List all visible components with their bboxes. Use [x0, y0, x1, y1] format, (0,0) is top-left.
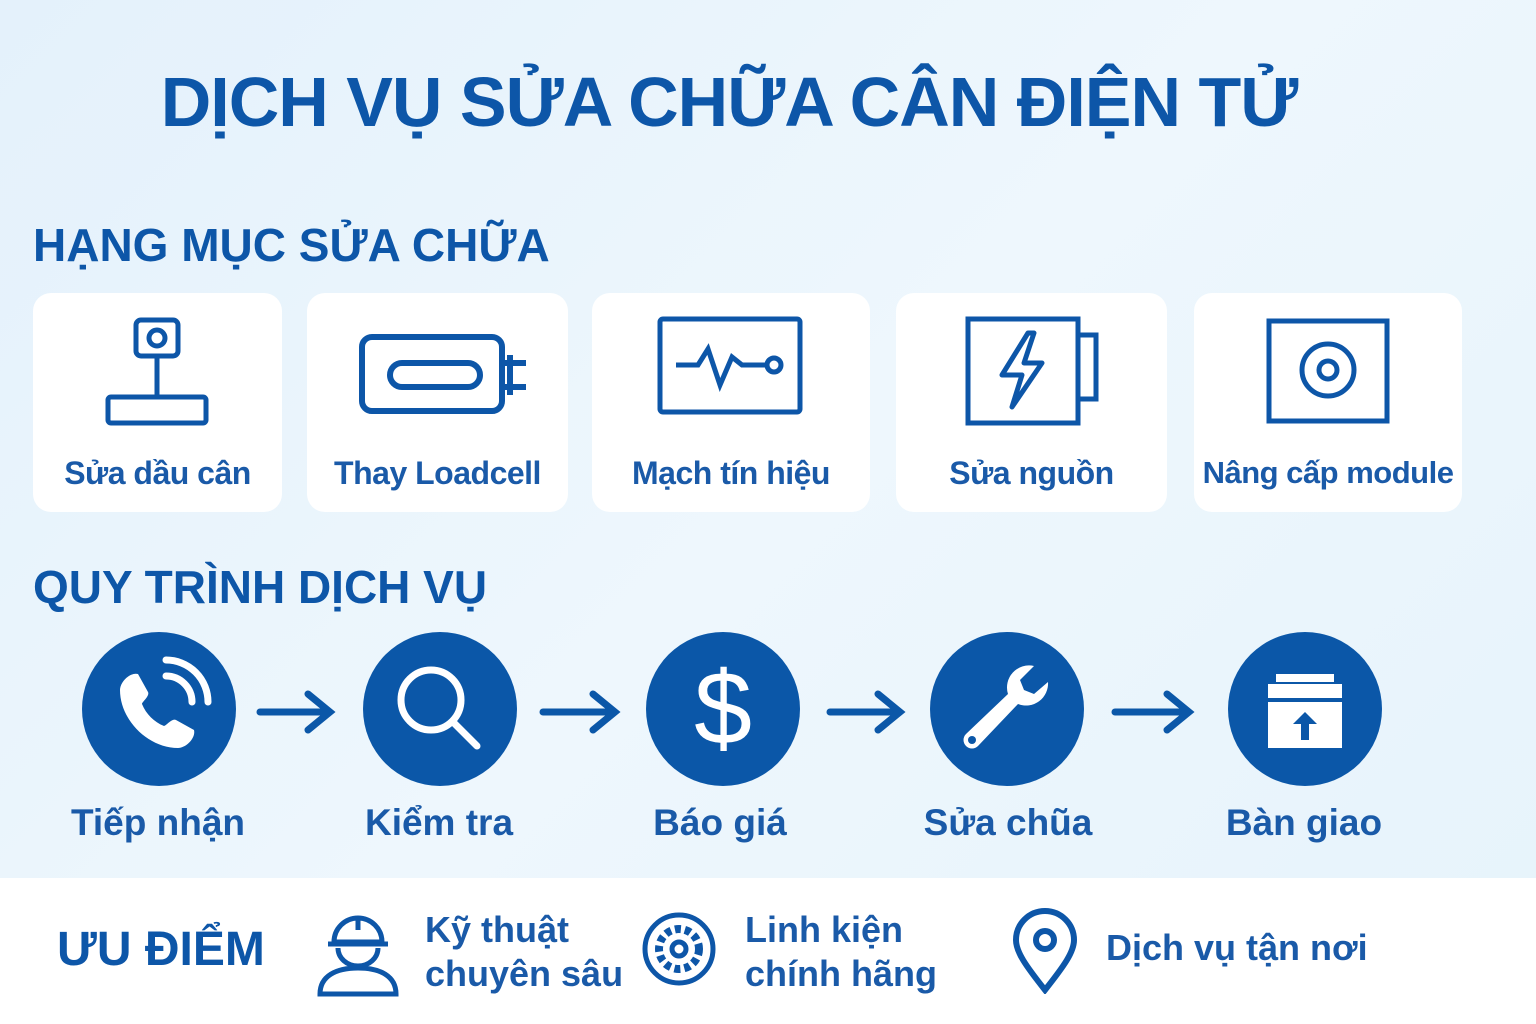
card: sửa nguồn	[896, 293, 1167, 512]
card: thay loadcell: Thay Loadcell	[334, 455, 541, 491]
heading: service process: QUY TRÌNH DỊCH VỤ	[33, 561, 487, 613]
text: Sửa chũa	[924, 802, 1092, 843]
arrow 4	[1112, 690, 1194, 734]
step 3 circle: dollar: $	[694, 651, 752, 767]
card: thay loadcell	[307, 293, 568, 512]
text: on-site service: Dịch vụ tận nơi	[1106, 927, 1368, 968]
icon: loadcell	[359, 334, 526, 414]
arrow 1	[256, 690, 336, 734]
text: expert technique: Kỹ thuật	[425, 909, 569, 950]
text: expert technique	[425, 909, 623, 994]
arrow 3	[826, 690, 906, 734]
text: genuine parts	[745, 909, 937, 994]
text: Kiểm tra	[365, 802, 513, 843]
card: sửa đầu cân	[33, 293, 282, 512]
step 4 circle: wrench	[930, 632, 1084, 786]
icon: worker	[318, 916, 398, 996]
text: Báo giá	[653, 802, 787, 843]
text: genuine parts: Linh kiện	[745, 909, 903, 950]
heading: repair categories: HẠNG MỤC SỬA CHỮA	[33, 219, 550, 271]
card: mạch tín hiệu	[592, 293, 870, 512]
card: mạch tín hiệu: Mạch tín hiệu	[632, 455, 830, 491]
step 3 circle: dollar	[646, 632, 800, 786]
step 1 circle: phone	[82, 632, 236, 786]
text: expert technique: chuyên sâu	[425, 953, 623, 994]
arrow 2	[540, 690, 620, 734]
card: nâng cấp module	[1194, 293, 1462, 512]
icon: scale head	[106, 318, 208, 426]
advantages band	[0, 878, 1536, 1024]
text: genuine parts: chính hãng	[745, 953, 937, 994]
icon: signal board	[658, 316, 802, 414]
title: DỊCH VỤ SỬA CHỮA CÂN ĐIỆN TỬ	[161, 63, 1297, 141]
icon: power	[966, 316, 1098, 426]
step 5 circle: handover	[1228, 632, 1382, 786]
icon: gear	[642, 912, 716, 986]
text: Bàn giao	[1226, 802, 1382, 843]
card: sửa nguồn: Sửa nguồn	[949, 455, 1114, 491]
heading: advantages: ƯU ĐIỂM	[57, 923, 265, 976]
icon: module	[1266, 318, 1390, 424]
step labels: Tiếp nhận	[71, 802, 245, 843]
card: nâng cấp module: Nâng cấp module	[1203, 455, 1453, 490]
step 2 circle: search	[363, 632, 517, 786]
card: sửa đầu cân: Sửa dầu cân	[64, 455, 251, 491]
icon: location pin	[1013, 908, 1077, 994]
